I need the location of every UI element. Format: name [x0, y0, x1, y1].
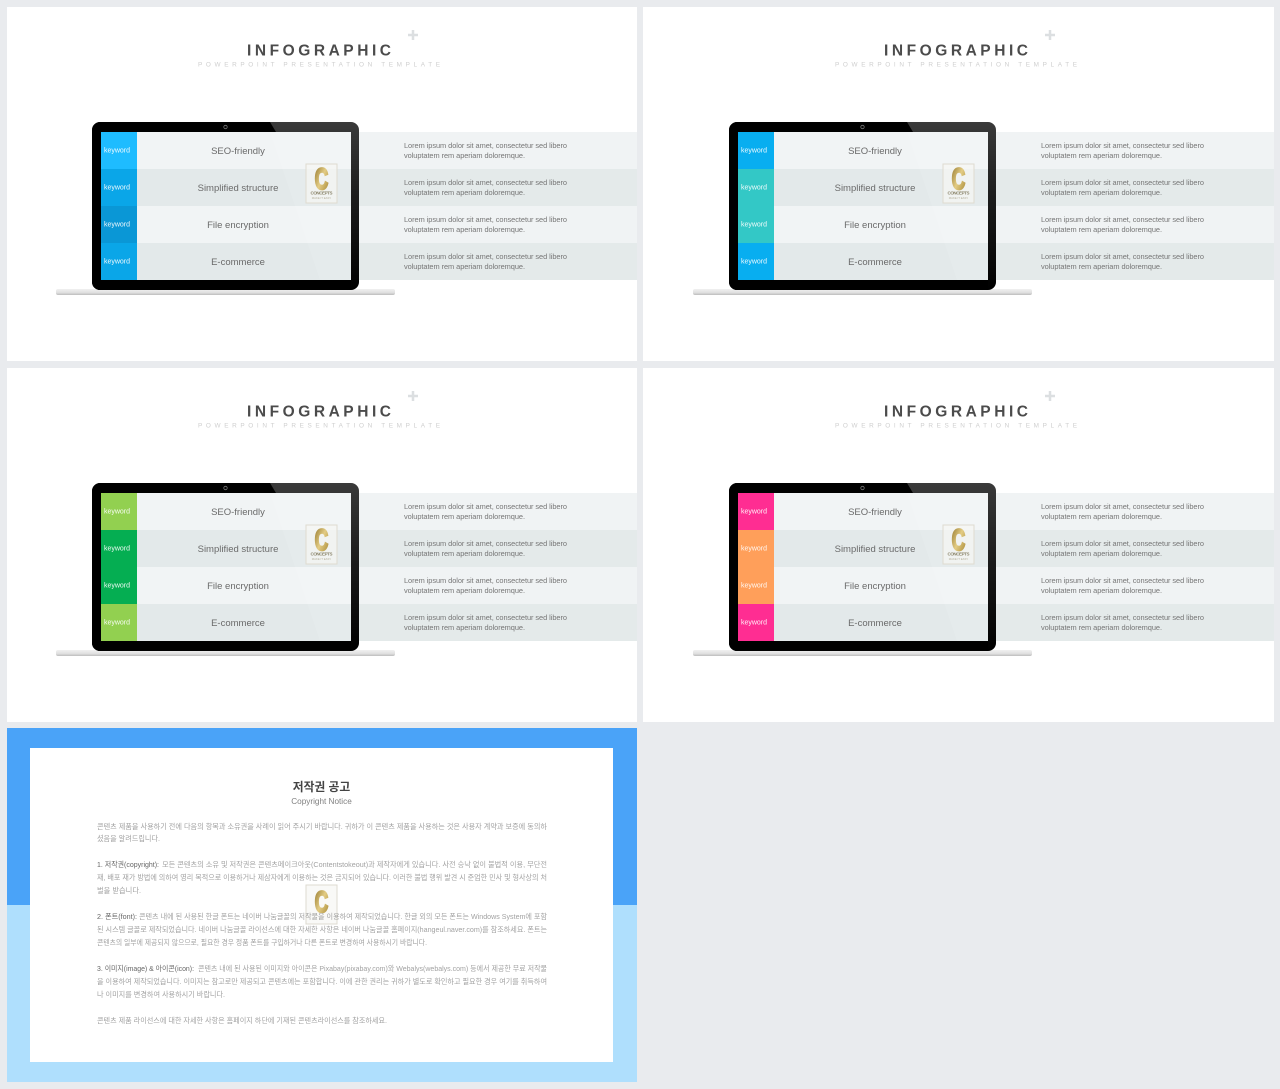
laptop: keyword	[741, 508, 767, 516]
description bands: voluptatem rem aperiam doloremque.	[404, 623, 525, 632]
laptop: Simplified structure	[835, 183, 915, 194]
panel: green laptop slide	[7, 368, 637, 722]
laptop	[693, 483, 1032, 656]
laptop: keyword	[741, 184, 767, 192]
icon: plus	[1045, 30, 1055, 40]
description bands: Lorem ipsum dolor sit amet, consectetur sed libero	[1041, 252, 1204, 261]
notice intro	[97, 822, 547, 843]
heading: POWERPOINT PRESENTATION TEMPLATE	[835, 62, 1077, 68]
description bands: Lorem ipsum dolor sit amet, consectetur sed libero	[404, 502, 567, 511]
laptop: E-commerce	[211, 618, 265, 629]
description bands: Lorem ipsum dolor sit amet, consectetur sed libero	[404, 613, 567, 622]
panel: copyright notice	[7, 728, 637, 1082]
laptop: File encryption	[207, 220, 269, 231]
notice item 1: 벌을 받습니다.	[97, 886, 141, 895]
logo	[943, 163, 974, 203]
description bands: voluptatem rem aperiam doloremque.	[1041, 549, 1162, 558]
laptop	[56, 122, 395, 295]
description bands: voluptatem rem aperiam doloremque.	[1041, 512, 1162, 521]
notice item 1: 모든 콘텐츠의 소유 및 저작권은 콘텐츠메이크아웃(Contentstokeout)과 제작자에게 있습니다. 사전 승낙 없이 불법적 이용, 무단전	[162, 860, 547, 869]
notice item 1: 재, 배포 재가 방법에 의하여 영리 목적으로 이용하거나 제삼자에게 이용하는 것은 금지되어 있습니다. 이러한 불법 행위 발견 시 준엄한 민사 및 형사상의 처	[97, 873, 547, 882]
laptop: keyword	[104, 148, 130, 154]
notice item 2	[97, 912, 547, 947]
laptop: keyword	[741, 148, 767, 154]
notice item 3: 나 이미지를 변경하여 사용하시기 바랍니다.	[97, 990, 225, 999]
heading: POWERPOINT PRESENTATION TEMPLATE	[198, 422, 440, 430]
notice intro: 콘텐츠 제품을 사용하기 전에 다음의 항목과 소유권을 사례이 읽어 주시기 바랍니다. 귀하가 이 콘텐츠 제품을 사용하는 것은 사용자 계약과 보증에 동의하	[97, 822, 547, 831]
heading: INFOGRAPHIC	[884, 404, 1028, 420]
laptop: E-commerce	[848, 618, 902, 629]
laptop: SEO-friendly	[211, 146, 265, 157]
description bands: voluptatem rem aperiam doloremque.	[1041, 225, 1162, 234]
laptop: Simplified structure	[835, 544, 915, 555]
heading: POWERPOINT PRESENTATION TEMPLATE	[835, 422, 1077, 430]
laptop: File encryption	[207, 581, 269, 592]
notice item 2: 콘텐츠 내에 된 사용된 한글 폰트는 네이버 나눔글꼴의 저작물을 이용하여 제작되었습니다. 한글 외의 모든 폰트는 Windows System에 포함	[139, 912, 547, 921]
panel: teal laptop slide	[643, 7, 1274, 361]
logo: MAKE IT EASY	[949, 196, 968, 200]
logo	[306, 163, 337, 203]
heading: INFOGRAPHIC	[247, 404, 391, 420]
description bands: Lorem ipsum dolor sit amet, consectetur sed libero	[1041, 502, 1204, 511]
laptop	[693, 122, 1032, 295]
description bands: voluptatem rem aperiam doloremque.	[1041, 188, 1162, 197]
heading	[198, 42, 440, 68]
icon: plus	[1045, 391, 1055, 401]
description bands: voluptatem rem aperiam doloremque.	[404, 512, 525, 521]
notice item 2: 콘텐츠의 일부에 제공되지 않으므로, 필요한 경우 정품 폰트를 구입하거나 다른 폰트로 변경하여 사용하시기 바랍니다.	[97, 938, 427, 947]
description bands: Lorem ipsum dolor sit amet, consectetur sed libero	[1041, 178, 1204, 187]
description bands: Lorem ipsum dolor sit amet, consectetur sed libero	[404, 141, 567, 150]
description bands: voluptatem rem aperiam doloremque.	[404, 188, 525, 197]
notice intro: 셨음을 알려드립니다.	[97, 834, 160, 843]
laptop: keyword	[741, 546, 767, 552]
description bands: voluptatem rem aperiam doloremque.	[404, 262, 525, 271]
laptop: keyword	[104, 582, 130, 590]
logo: C	[952, 163, 965, 196]
heading	[835, 42, 1077, 68]
description bands: voluptatem rem aperiam doloremque.	[404, 225, 525, 234]
laptop: Simplified structure	[198, 544, 278, 555]
description bands: Lorem ipsum dolor sit amet, consectetur sed libero	[1041, 576, 1204, 585]
laptop: keyword	[741, 222, 767, 228]
description bands: voluptatem rem aperiam doloremque.	[404, 549, 525, 558]
description bands	[359, 132, 637, 280]
description bands: Lorem ipsum dolor sit amet, consectetur sed libero	[404, 215, 567, 224]
description bands: Lorem ipsum dolor sit amet, consectetur sed libero	[404, 539, 567, 548]
description bands: voluptatem rem aperiam doloremque.	[404, 151, 525, 160]
logo: MAKE IT EASY	[312, 196, 331, 200]
description bands: voluptatem rem aperiam doloremque.	[404, 586, 525, 595]
description bands	[996, 493, 1274, 641]
logo	[306, 524, 337, 564]
laptop: keyword	[104, 258, 130, 266]
description bands: Lorem ipsum dolor sit amet, consectetur sed libero	[404, 178, 567, 187]
description bands: Lorem ipsum dolor sit amet, consectetur sed libero	[404, 252, 567, 261]
icon: plus	[408, 30, 418, 40]
panel: pink laptop slide	[643, 368, 1274, 722]
logo watermark: C	[315, 886, 328, 919]
notice item 2: 된 시스템 글꼴로 제작되었습니다. 네이버 나눔글꼴 라이선스에 대한 자세한 사항은 네이버 나눔글꼴 홈페이지(hangeul.naver.com)를 참조하세요. 폰트는	[97, 925, 547, 934]
description bands: voluptatem rem aperiam doloremque.	[1041, 623, 1162, 632]
logo: MAKE IT EASY	[312, 557, 331, 561]
description bands: Lorem ipsum dolor sit amet, consectetur sed libero	[404, 576, 567, 585]
laptop	[56, 483, 395, 656]
logo: CONCEPTS	[310, 552, 332, 556]
description bands: Lorem ipsum dolor sit amet, consectetur sed libero	[1041, 141, 1204, 150]
laptop: keyword	[104, 508, 130, 516]
icon: plus	[408, 391, 418, 401]
laptop: E-commerce	[848, 257, 902, 268]
logo watermark	[306, 885, 337, 924]
notice item 3	[97, 964, 547, 999]
logo: CONCEPTS	[310, 190, 332, 196]
logo: CONCEPTS	[948, 552, 970, 556]
heading	[835, 404, 1077, 430]
logo	[943, 524, 974, 564]
heading	[198, 404, 440, 430]
notice item 3: 3. 이미지(image) & 아이콘(icon):	[97, 964, 194, 973]
laptop: keyword	[104, 222, 130, 228]
notice heading: 저작권 공고	[293, 780, 350, 794]
notice heading: Copyright Notice	[291, 797, 352, 806]
laptop: keyword	[741, 258, 767, 266]
notice heading	[291, 780, 352, 806]
laptop: File encryption	[844, 581, 906, 592]
laptop: keyword	[741, 620, 767, 626]
description bands: Lorem ipsum dolor sit amet, consectetur sed libero	[1041, 539, 1204, 548]
logo: C	[315, 163, 328, 196]
laptop: File encryption	[844, 220, 906, 231]
heading: INFOGRAPHIC	[884, 42, 1028, 60]
description bands	[996, 132, 1274, 280]
laptop: keyword	[104, 620, 130, 626]
notice footer: 콘텐츠 제품 라이선스에 대한 자세한 사항은 홈페이지 하단에 기재된 콘텐츠라이선스를 참조하세요.	[97, 1016, 387, 1025]
laptop: SEO-friendly	[848, 507, 902, 518]
notice item 2: 2. 폰트(font):	[97, 912, 137, 921]
laptop: SEO-friendly	[848, 146, 902, 157]
description bands: voluptatem rem aperiam doloremque.	[1041, 586, 1162, 595]
notice item 1	[97, 860, 547, 895]
laptop: Simplified structure	[198, 183, 278, 194]
notice item 3: 콘텐츠 내에 된 사용된 이미지와 아이콘은 Pixabay(pixabay.com)와 Webalys(webalys.com) 등에서 제공한 무료 저작물	[198, 964, 547, 973]
notice item 1: 1. 저작권(copyright):	[97, 860, 159, 869]
laptop: keyword	[104, 184, 130, 192]
description bands	[359, 493, 637, 641]
description bands: voluptatem rem aperiam doloremque.	[1041, 151, 1162, 160]
description bands: voluptatem rem aperiam doloremque.	[1041, 262, 1162, 271]
logo: C	[315, 524, 328, 557]
laptop: keyword	[741, 582, 767, 590]
heading: POWERPOINT PRESENTATION TEMPLATE	[198, 62, 440, 68]
description bands: Lorem ipsum dolor sit amet, consectetur sed libero	[1041, 613, 1204, 622]
laptop: keyword	[104, 546, 130, 552]
laptop: E-commerce	[211, 257, 265, 268]
logo: CONCEPTS	[948, 190, 970, 196]
logo: MAKE IT EASY	[949, 557, 968, 561]
description bands: Lorem ipsum dolor sit amet, consectetur sed libero	[1041, 215, 1204, 224]
laptop: SEO-friendly	[211, 507, 265, 518]
notice item 3: 을 이용하여 제작되었습니다. 이미지는 참고로만 제공되고 콘텐츠에는 포함합니다. 이에 관한 권리는 귀하가 별도로 확인하고 필요한 경우 여기를 취득하여	[97, 977, 547, 986]
panel: blue laptop slide	[7, 7, 637, 361]
logo: C	[952, 524, 965, 557]
heading: INFOGRAPHIC	[247, 42, 391, 60]
